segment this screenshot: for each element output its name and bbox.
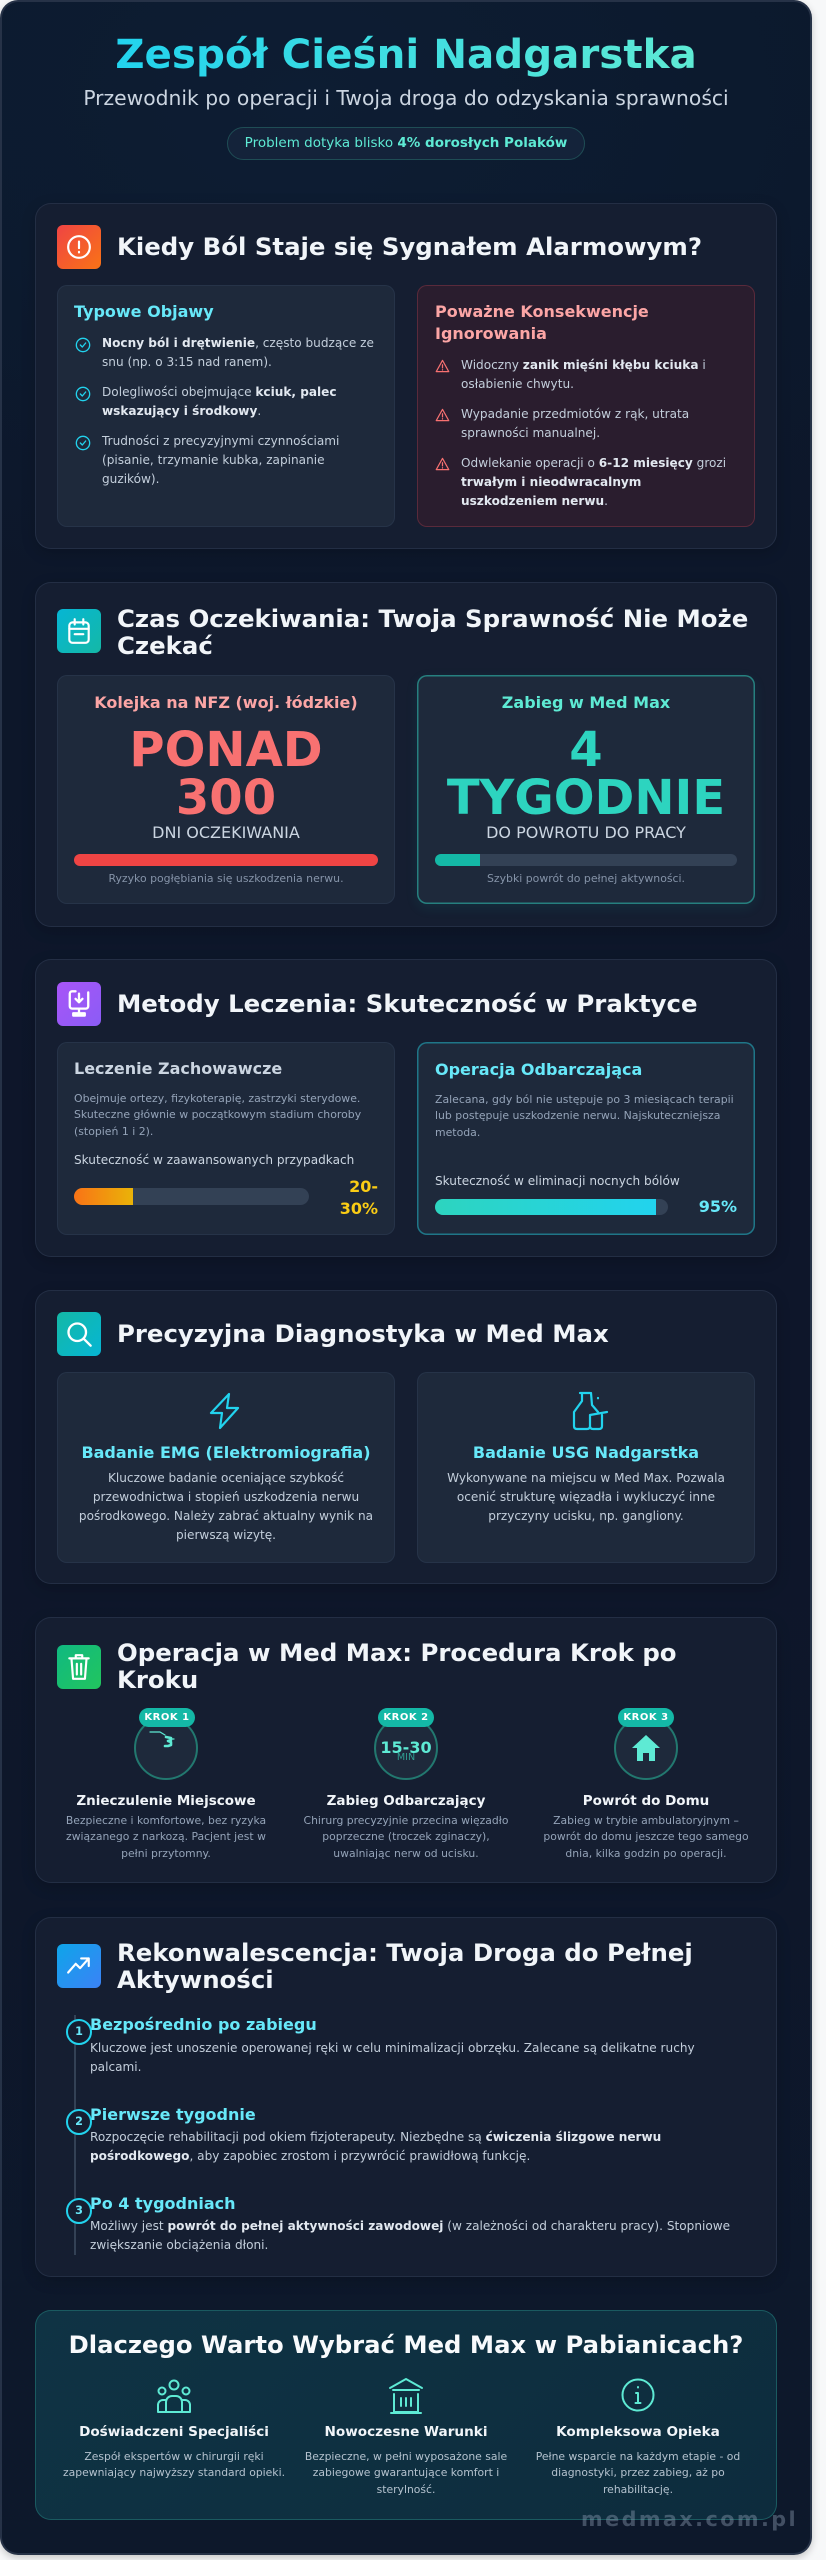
step description bbox=[304, 1814, 508, 1860]
step circle bbox=[374, 1716, 438, 1780]
benefit title: Kompleksowa Opieka bbox=[556, 2424, 720, 2440]
badge bbox=[378, 1708, 434, 1727]
unit: DO POWROTU DO PRACY bbox=[486, 823, 686, 842]
number bbox=[66, 2019, 92, 2045]
consequence 2: Wypadanie przedmiotów z rąk, utrata bbox=[461, 407, 689, 421]
description: Wykonywane na miejscu w Med Max. Pozwala bbox=[447, 1471, 725, 1485]
badge: KROK 3 bbox=[623, 1712, 669, 1723]
heading: Dlaczego Warto Wybrać Med Max w Pabianicach? bbox=[69, 2330, 743, 2359]
progress bar bbox=[74, 1188, 309, 1205]
icon: alert bbox=[57, 225, 101, 269]
icon: monitor bbox=[57, 982, 101, 1026]
description: przewodnictwa i stopień uszkodzenia nerwu bbox=[93, 1490, 359, 1504]
duration unit: MIN bbox=[397, 1752, 415, 1763]
symptom 1: snu (np. o 3:15 nad ranem). bbox=[102, 355, 272, 369]
step description: dnia, kilka godzin po operacji. bbox=[565, 1847, 727, 1860]
milestone text: zwiększanie obciążenia dłoni. bbox=[90, 2238, 268, 2252]
card: USG bbox=[417, 1372, 755, 1563]
caption: Szybki powrót do pełnej aktywności. bbox=[487, 872, 685, 885]
description: Kluczowe badanie oceniające szybkość bbox=[108, 1471, 344, 1485]
heading: Czas Oczekiwania: Twoja Sprawność Nie Może bbox=[117, 604, 748, 633]
milestone 1 bbox=[66, 2015, 695, 2074]
benefit text bbox=[305, 2450, 507, 2496]
milestone 3 bbox=[66, 2194, 730, 2252]
card: NFZ queue bbox=[57, 675, 395, 904]
caption: Ryzyko pogłębiania się uszkodzenia nerwu. bbox=[108, 872, 344, 885]
description: pośrodkowego. Należy zabrać aktualny wynik na bbox=[79, 1509, 373, 1523]
panel: treatment methods bbox=[35, 959, 777, 1257]
number: 1 bbox=[75, 2025, 83, 2038]
description: ocenić strukturę więzadła i wykluczyć inne bbox=[457, 1490, 715, 1504]
stat pill bbox=[227, 127, 585, 160]
card heading: Ignorowania bbox=[435, 324, 547, 343]
milestone heading: Bezpośrednio po zabiegu bbox=[90, 2015, 317, 2034]
value: 95% bbox=[699, 1197, 737, 1216]
icon: calendar bbox=[57, 609, 101, 653]
card: EMG bbox=[57, 1372, 395, 1563]
badge: KROK 1 bbox=[144, 1712, 190, 1723]
milestone text: Kluczowe jest unoszenie operowanej ręki w celu minimalizacji obrzęku. Zalecane są delikatne ruchy bbox=[90, 2041, 695, 2055]
icon: info bbox=[620, 2377, 656, 2413]
icon: team bbox=[157, 2380, 191, 2413]
step description: Chirurg precyzyjnie przecina więzadło bbox=[304, 1814, 508, 1827]
progress bar bbox=[435, 854, 737, 866]
description bbox=[447, 1471, 725, 1523]
description: metoda. bbox=[435, 1126, 480, 1139]
panel: diagnostics bbox=[35, 1290, 777, 1584]
bar label: Skuteczność w eliminacji nocnych bólów bbox=[435, 1174, 680, 1188]
big number: PONAD bbox=[129, 722, 323, 778]
symptom 2: wskazujący i środkowy. bbox=[102, 404, 261, 418]
icon: flasks bbox=[572, 1392, 608, 1430]
card heading: Badanie USG Nadgarstka bbox=[473, 1443, 699, 1462]
step description: powrót do domu jeszcze tego samego bbox=[543, 1830, 749, 1843]
milestone text bbox=[90, 2130, 661, 2163]
symptom 1 bbox=[76, 336, 374, 369]
consequence 1: Widoczny zanik mięśni kłębu kciuka i bbox=[461, 358, 706, 372]
symptom 3: Trudności z precyzyjnymi czynnościami bbox=[102, 434, 339, 448]
watermark: medmax.com.pl bbox=[581, 2507, 798, 2531]
milestone heading: Pierwsze tygodnie bbox=[90, 2105, 256, 2124]
symptom 2 bbox=[76, 385, 337, 418]
benefit 3 bbox=[519, 2375, 757, 2500]
consequence 3: uszkodzeniem nerwu. bbox=[461, 494, 608, 508]
heading: Czekać bbox=[117, 631, 213, 660]
benefit text: zabiegowe gwarantujące komfort i bbox=[313, 2466, 499, 2479]
badge: KROK 2 bbox=[383, 1712, 429, 1723]
description: przyczyny ucisku, np. gangliony. bbox=[488, 1509, 684, 1523]
icon: building bbox=[389, 2378, 423, 2414]
description bbox=[74, 1092, 361, 1138]
step 1 bbox=[66, 1708, 266, 1860]
stat pill: Problem dotyka blisko 4% dorosłych Polaków bbox=[245, 135, 567, 151]
heading: Aktywności bbox=[117, 1965, 274, 1994]
card heading bbox=[435, 302, 649, 343]
benefit text: rehabilitację. bbox=[603, 2483, 673, 2496]
heading bbox=[117, 1638, 677, 1694]
description: (stopień 1 i 2). bbox=[74, 1125, 153, 1138]
card heading: Poważne Konsekwencje bbox=[435, 302, 649, 321]
symptom 3: guzików). bbox=[102, 472, 159, 486]
panel: waiting time bbox=[35, 582, 777, 927]
symptom 3 bbox=[76, 434, 339, 486]
progress bar bbox=[74, 854, 378, 866]
number bbox=[66, 2198, 92, 2224]
big number bbox=[129, 722, 323, 826]
card: surgery bbox=[417, 1042, 755, 1235]
benefit 2 bbox=[305, 2378, 507, 2496]
bar label: Skuteczność w zaawansowanych przypadkach bbox=[74, 1153, 354, 1167]
card: consequences bbox=[417, 285, 755, 527]
description: Zalecana, gdy ból nie ustępuje po 3 miesiącach terapii bbox=[435, 1093, 734, 1106]
benefit 1 bbox=[63, 2380, 285, 2479]
card: Med Max bbox=[417, 675, 755, 904]
benefit text: Bezpieczne, w pełni wyposażone sale bbox=[305, 2450, 507, 2463]
milestone text: palcami. bbox=[90, 2060, 142, 2074]
description bbox=[79, 1471, 373, 1542]
symptom 1: Nocny ból i drętwienie, często budzące ze bbox=[102, 336, 374, 350]
icon: syringe bbox=[149, 1731, 175, 1748]
big number: TYGODNIE bbox=[447, 770, 725, 826]
step description: pełni przytomny. bbox=[121, 1847, 211, 1860]
heading: Precyzyjna Diagnostyka w Med Max bbox=[117, 1319, 609, 1348]
card heading: Leczenie Zachowawcze bbox=[74, 1059, 282, 1078]
benefit title: Nowoczesne Warunki bbox=[325, 2424, 487, 2440]
step description: uwalniając nerw od ucisku. bbox=[333, 1847, 479, 1860]
icon: trending up bbox=[57, 1944, 101, 1988]
consequence 2 bbox=[436, 407, 689, 440]
step description: poprzeczne (troczek zginaczy), bbox=[322, 1830, 490, 1843]
consequence 1 bbox=[436, 358, 706, 391]
heading bbox=[117, 604, 748, 660]
heading: Operacja w Med Max: Procedura Krok po bbox=[117, 1638, 677, 1667]
icon: home bbox=[632, 1735, 660, 1761]
card heading: Zabieg w Med Max bbox=[502, 693, 670, 712]
badge bbox=[139, 1708, 195, 1727]
heading: Kiedy Ból Staje się Sygnałem Alarmowym? bbox=[117, 232, 702, 261]
milestone text bbox=[90, 2219, 730, 2252]
benefit title: Doświadczeni Specjaliści bbox=[79, 2424, 269, 2440]
milestone text bbox=[90, 2041, 695, 2074]
progress bar bbox=[435, 1199, 668, 1215]
benefit text: zapewniający najwyższy standard opieki. bbox=[63, 2466, 285, 2479]
value: 30% bbox=[340, 1199, 378, 1218]
heading: Rekonwalescencja: Twoja Droga do Pełnej bbox=[117, 1938, 693, 1967]
panel: recovery bbox=[35, 1917, 777, 2277]
consequence 2: sprawności manualnej. bbox=[461, 426, 600, 440]
number bbox=[66, 2109, 92, 2135]
icon: trash bbox=[57, 1645, 101, 1689]
step title: Znieczulenie Miejscowe bbox=[76, 1793, 256, 1809]
benefit text: Zespół ekspertów w chirurgii ręki bbox=[84, 2450, 264, 2463]
unit: DNI OCZEKIWANIA bbox=[152, 823, 300, 842]
timeline line bbox=[74, 2015, 76, 2255]
step description bbox=[66, 1814, 266, 1860]
value: 20- bbox=[349, 1177, 378, 1196]
benefit text bbox=[519, 2449, 757, 2498]
badge bbox=[618, 1708, 674, 1727]
step 3 bbox=[543, 1708, 749, 1860]
big number: 300 bbox=[176, 770, 276, 826]
benefit text: sterylność. bbox=[377, 2483, 435, 2496]
icon: search bbox=[57, 1312, 101, 1356]
panel: why Med Max bbox=[35, 2310, 777, 2520]
milestone 2 bbox=[66, 2105, 661, 2163]
description: pierwszą wizytę. bbox=[176, 1528, 276, 1542]
description: Obejmuje ortezy, fizykoterapię, zastrzyki sterydowe. bbox=[74, 1092, 360, 1105]
milestone text: Możliwy jest powrót do pełnej aktywności zawodowej (w zależności od charakteru pracy). Stopniowe bbox=[90, 2219, 730, 2233]
step title: Zabieg Odbarczający bbox=[327, 1793, 485, 1809]
step 2 bbox=[304, 1708, 508, 1860]
symptom 3: (pisanie, trzymanie kubka, zapinanie bbox=[102, 453, 325, 467]
consequence 3: Odwlekanie operacji o 6-12 miesięcy grozi bbox=[461, 456, 726, 470]
card: typical symptoms bbox=[57, 285, 395, 527]
big number: 4 bbox=[569, 722, 603, 778]
benefit text bbox=[63, 2450, 285, 2479]
card heading: Kolejka na NFZ (woj. łódzkie) bbox=[94, 693, 358, 712]
consequence 3 bbox=[436, 456, 726, 508]
step description: Bezpieczne i komfortowe, bez ryzyka bbox=[66, 1814, 266, 1827]
description bbox=[435, 1093, 734, 1139]
number: 2 bbox=[75, 2115, 83, 2128]
step circle bbox=[614, 1716, 678, 1780]
heading bbox=[117, 1938, 693, 1994]
step title: Powrót do Domu bbox=[583, 1793, 709, 1809]
description: lub postępuje uszkodzenie nerwu. Najskuteczniejsza bbox=[435, 1109, 720, 1122]
big number bbox=[447, 722, 725, 826]
step circle bbox=[134, 1716, 198, 1780]
icon: bolt bbox=[210, 1392, 240, 1430]
subtitle: Przewodnik po operacji i Twoja droga do odzyskania sprawności bbox=[83, 86, 729, 110]
panel: alarm signals bbox=[35, 203, 777, 549]
step description: Zabieg w trybie ambulatoryjnym – bbox=[553, 1814, 739, 1827]
consequence 3: trwałym i nieodwracalnym bbox=[461, 475, 641, 489]
milestone heading: Po 4 tygodniach bbox=[90, 2194, 236, 2213]
card heading: Badanie EMG (Elektromiografia) bbox=[81, 1443, 371, 1462]
benefit text: diagnostyki, przez zabieg, aż po bbox=[551, 2466, 725, 2479]
milestone text: Rozpoczęcie rehabilitacji pod okiem fizjoterapeuty. Niezbędne są ćwiczenia ślizgowe nerwu bbox=[90, 2130, 661, 2144]
title: Zespół Cieśni Nadgarstka bbox=[115, 30, 697, 78]
card heading: Operacja Odbarczająca bbox=[435, 1060, 642, 1079]
card heading: Typowe Objawy bbox=[74, 302, 214, 321]
consequence 1: osłabienie chwytu. bbox=[461, 377, 574, 391]
step description bbox=[543, 1814, 749, 1860]
benefit text: Pełne wsparcie na każdym etapie - od bbox=[536, 2450, 740, 2463]
symptom 2: Dolegliwości obejmujące kciuk, palec bbox=[102, 385, 337, 399]
description: Skuteczne głównie w początkowym stadium choroby bbox=[74, 1108, 361, 1121]
panel: procedure bbox=[35, 1617, 777, 1883]
number: 3 bbox=[75, 2204, 83, 2217]
value bbox=[340, 1177, 378, 1218]
heading: Kroku bbox=[117, 1665, 198, 1694]
card: conservative bbox=[57, 1042, 395, 1235]
step description: związanego z narkozą. Pacjent jest w bbox=[66, 1830, 266, 1843]
duration: 15-30 bbox=[380, 1738, 432, 1757]
milestone text: pośrodkowego, aby zapobiec zrostom i przywrócić prawidłową funkcję. bbox=[90, 2149, 530, 2163]
heading: Metody Leczenia: Skuteczność w Praktyce bbox=[117, 989, 698, 1018]
